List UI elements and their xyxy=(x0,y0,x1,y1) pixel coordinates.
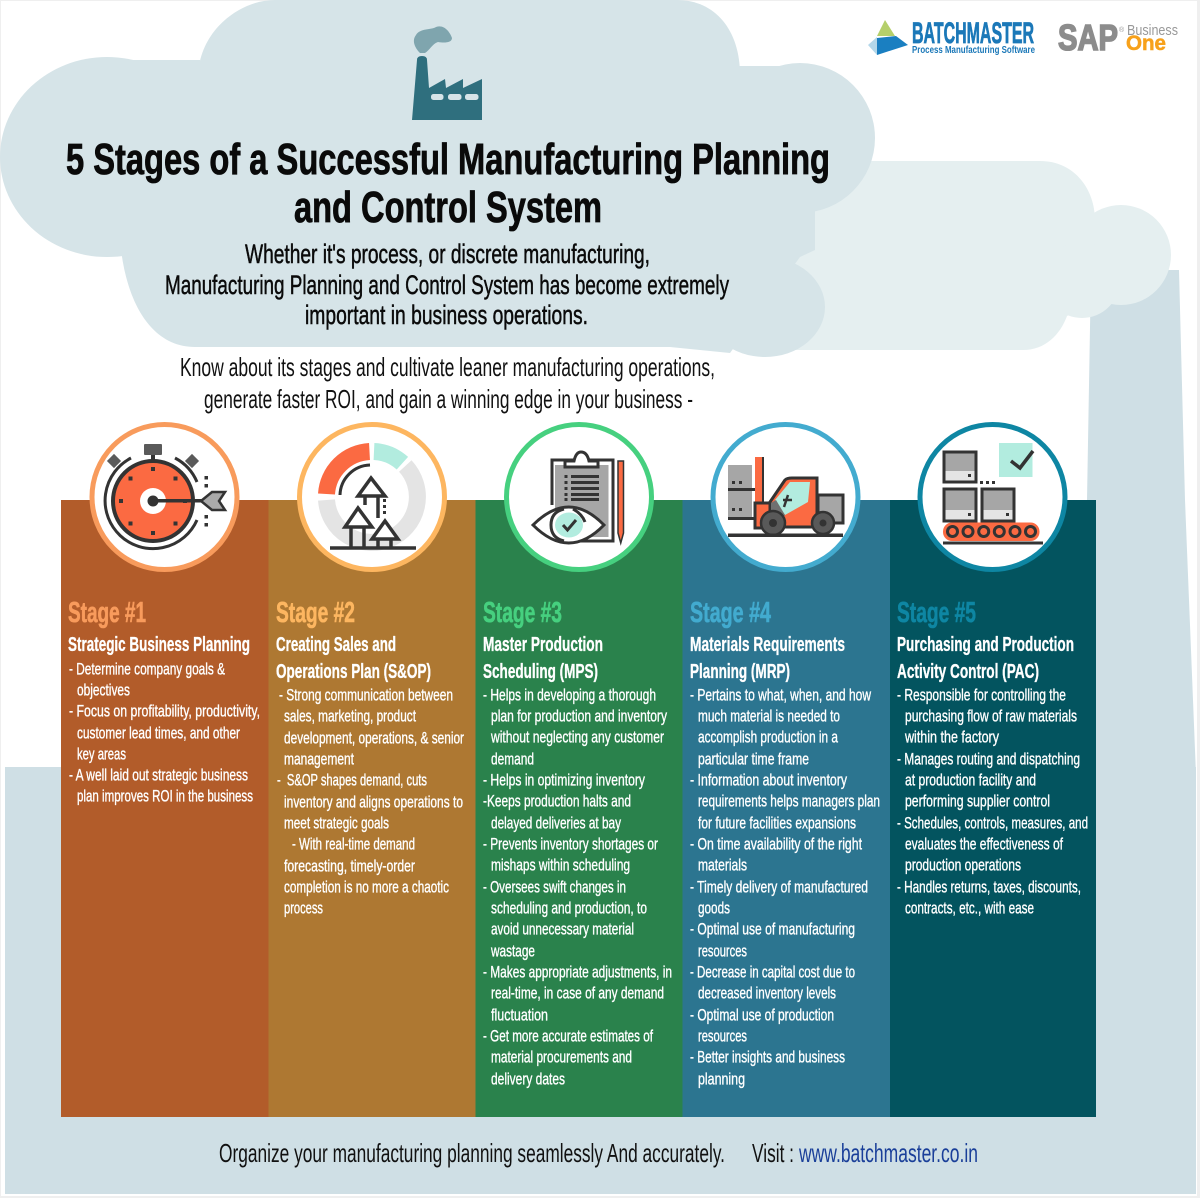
stage 5 bullets: performing supplier control xyxy=(905,792,1050,810)
stage 4 bullets: materials xyxy=(698,856,747,874)
stage 2 bullets: completion is no more a chaotic xyxy=(284,878,449,896)
stage 3 bullets: real-time, in case of any demand xyxy=(491,984,664,1002)
stage 3 bullets: delivery dates xyxy=(491,1070,565,1088)
footer call to action: Organize your manufacturing planning seamlessly And accurately. xyxy=(219,1138,725,1168)
icon: stopwatch target xyxy=(92,424,237,570)
stage 3 bullets: delayed deliveries at bay xyxy=(491,814,622,832)
stage 3 label: Stage #3 xyxy=(483,597,562,629)
icon: forklift xyxy=(713,424,858,570)
subtitle: Manufacturing Planning and Control System has become extremely xyxy=(165,270,729,300)
stage 1 label: Stage #1 xyxy=(68,597,146,629)
stage 4 bullets xyxy=(690,686,880,1088)
stage 1 bullets: - A well laid out strategic business xyxy=(69,766,248,784)
stage 4 bullets: - Optimal use of manufacturing xyxy=(690,920,855,938)
stage 2 bullets: development, operations, & senior xyxy=(284,729,464,747)
logo: BatchMaster: Process Manufacturing Software xyxy=(912,44,1035,56)
stage 4 bullets: - Better insights and business xyxy=(690,1048,845,1066)
stage 3 bullets: - Oversees swift changes in xyxy=(483,878,626,896)
stage 1 bullets: customer lead times, and other xyxy=(77,724,240,742)
stage 1 bullets: - Focus on profitability, productivity, xyxy=(69,702,260,720)
logo: SAP Business One: One xyxy=(1126,32,1166,55)
stage 2 bullets: management xyxy=(284,750,354,768)
panel: stage 2 xyxy=(268,500,476,1117)
stage 4 bullets: for future facilities expansions xyxy=(698,814,856,832)
stage 3 bullets: - Makes appropriate adjustments, in xyxy=(483,963,672,981)
stage 4 bullets: requirements helps managers plan xyxy=(698,792,880,810)
subtitle: Whether it's process, or discrete manufacturing, xyxy=(245,239,650,269)
stage 4 bullets: planning xyxy=(698,1070,745,1088)
stage 5 bullets xyxy=(897,686,1088,917)
stage 5 bullets: - Manages routing and dispatching xyxy=(897,750,1080,768)
intro text xyxy=(180,352,715,414)
light smoke cloud xyxy=(790,161,1171,350)
stage 3 heading: Scheduling (MPS) xyxy=(483,661,598,683)
stage 2 bullets: sales, marketing, product xyxy=(284,707,416,725)
icon: factory xyxy=(412,26,482,120)
stage 2 bullets: inventory and aligns operations to xyxy=(284,793,463,811)
stage 3 heading: Master Production xyxy=(483,634,603,656)
stage 2 bullets: - Strong communication between xyxy=(279,686,453,704)
stage 4 bullets: much material is needed to xyxy=(698,707,840,725)
stage 2 heading xyxy=(276,634,431,683)
logo: SAP Business One: SAP xyxy=(1058,17,1118,58)
stage 2 heading: Creating Sales and xyxy=(276,634,396,656)
stage 5 bullets: - Handles returns, taxes, discounts, xyxy=(897,878,1081,896)
panel: stage 3 xyxy=(476,500,682,1117)
stage 4 bullets: - Pertains to what, when, and how xyxy=(690,686,871,704)
stage 3 bullets xyxy=(483,686,672,1088)
footer call to action: www.batchmaster.co.in xyxy=(798,1138,978,1168)
stage 3 bullets: avoid unnecessary material xyxy=(491,920,634,938)
icon: clipboard and eye xyxy=(506,424,652,570)
stage 5 bullets: - Schedules, controls, measures, and xyxy=(897,814,1088,832)
stage 4 bullets: goods xyxy=(698,899,730,917)
stage 2 bullets: meet strategic goals xyxy=(284,814,389,832)
stage 5 bullets: purchasing flow of raw materials xyxy=(905,707,1077,725)
footer call to action: Visit : xyxy=(752,1138,794,1168)
logo: SAP Business One: ® xyxy=(1119,26,1125,34)
stage 2 bullets: - With real-time demand xyxy=(292,835,415,853)
stage 2 heading: Operations Plan (S&OP) xyxy=(276,661,431,683)
dark smoke cloud xyxy=(0,0,875,357)
stage 4 bullets: - Timely delivery of manufactured xyxy=(690,878,868,896)
stage 5 heading: Activity Control (PAC) xyxy=(897,661,1039,683)
stage 4 bullets: resources xyxy=(698,1027,747,1045)
stage 3 bullets: demand xyxy=(491,750,534,768)
stage 4 heading xyxy=(690,634,845,683)
stage 3 bullets: without neglecting any customer xyxy=(490,728,664,746)
stage 1 bullets: plan improves ROI in the business xyxy=(77,787,253,805)
stage 1 bullets: - Determine company goals & xyxy=(69,660,225,678)
stage 4 bullets: particular time frame xyxy=(698,750,809,768)
stage 2 label: Stage #2 xyxy=(276,597,355,629)
stage 3 bullets: wastage xyxy=(490,942,535,960)
stage 1 bullets: objectives xyxy=(77,681,130,699)
stage 5 bullets: contracts, etc., with ease xyxy=(905,899,1034,917)
title xyxy=(66,135,830,232)
stage 2 bullets: - S&OP shapes demand, cuts xyxy=(277,771,427,789)
icon: conveyor with boxes xyxy=(920,424,1065,570)
stage 5 bullets: evaluates the effectiveness of xyxy=(905,835,1063,853)
panel: stage 4 xyxy=(682,500,890,1117)
background chimney xyxy=(1080,270,1196,1000)
stage 5 bullets: - Responsible for controlling the xyxy=(897,686,1066,704)
stage 4 bullets: - On time availability of the right xyxy=(690,835,862,853)
stage 3 bullets: plan for production and inventory xyxy=(491,707,668,725)
stage 3 bullets: scheduling and production, to xyxy=(491,899,647,917)
logo: SAP Business One: Business xyxy=(1127,22,1178,39)
stage 4 bullets: - Optimal use of production xyxy=(690,1006,834,1024)
stage 4 bullets: resources xyxy=(698,942,747,960)
stage 1 bullets xyxy=(69,660,260,805)
stage 3 bullets: mishaps within scheduling xyxy=(491,856,630,874)
stage 2 bullets: forecasting, timely-order xyxy=(284,857,415,875)
stage 3 heading xyxy=(483,634,603,683)
stage 4 bullets: accomplish production in a xyxy=(698,728,839,746)
panel: stage 1 xyxy=(61,500,268,1117)
stage 5 bullets: at production facility and xyxy=(905,771,1036,789)
panel: stage 5 xyxy=(890,500,1096,1117)
title: 5 Stages of a Successful Manufacturing Planning xyxy=(66,135,830,184)
stage 3 bullets: - Helps in developing a thorough xyxy=(483,686,656,704)
stage 3 bullets: - Prevents inventory shortages or xyxy=(483,835,658,853)
stage 3 bullets: - Get more accurate estimates of xyxy=(483,1027,653,1045)
stage 4 bullets: - Decrease in capital cost due to xyxy=(690,963,855,981)
subtitle xyxy=(165,239,729,330)
background ground band xyxy=(5,767,1196,1194)
stage 3 bullets: material procurements and xyxy=(491,1048,632,1066)
icon: donut chart with arrows xyxy=(300,424,444,570)
stage 1 bullets: key areas xyxy=(77,745,126,763)
intro text: generate faster ROI, and gain a winning edge in your business - xyxy=(204,384,693,414)
logo: BatchMaster xyxy=(868,17,1035,56)
subtitle: important in business operations. xyxy=(305,300,588,330)
intro text: Know about its stages and cultivate leaner manufacturing operations, xyxy=(180,352,715,382)
stage 5 heading xyxy=(897,634,1074,683)
stage 4 bullets: decreased inventory levels xyxy=(698,984,836,1002)
logo: BatchMaster: BATCHMASTER xyxy=(912,17,1034,50)
stage 3 bullets: - Helps in optimizing inventory xyxy=(483,771,646,789)
stage 3 bullets: -Keeps production halts and xyxy=(483,792,631,810)
stage 5 heading: Purchasing and Production xyxy=(897,634,1074,656)
stage 5 bullets: within the factory xyxy=(904,728,1000,746)
stage 5 bullets: production operations xyxy=(905,856,1021,874)
stage 4 heading: Materials Requirements xyxy=(690,634,845,656)
logo: SAP Business One xyxy=(1058,17,1178,58)
stage 3 bullets: fluctuation xyxy=(491,1006,548,1024)
stage 4 label: Stage #4 xyxy=(690,597,771,629)
stage 1 heading: Strategic Business Planning xyxy=(68,634,250,656)
stage 2 bullets: process xyxy=(284,899,323,917)
stage 4 bullets: - Information about inventory xyxy=(690,771,848,789)
title: and Control System xyxy=(294,183,602,232)
stage 4 heading: Planning (MRP) xyxy=(690,661,790,683)
stage 2 bullets xyxy=(277,686,464,917)
stage 5 label: Stage #5 xyxy=(897,597,976,629)
